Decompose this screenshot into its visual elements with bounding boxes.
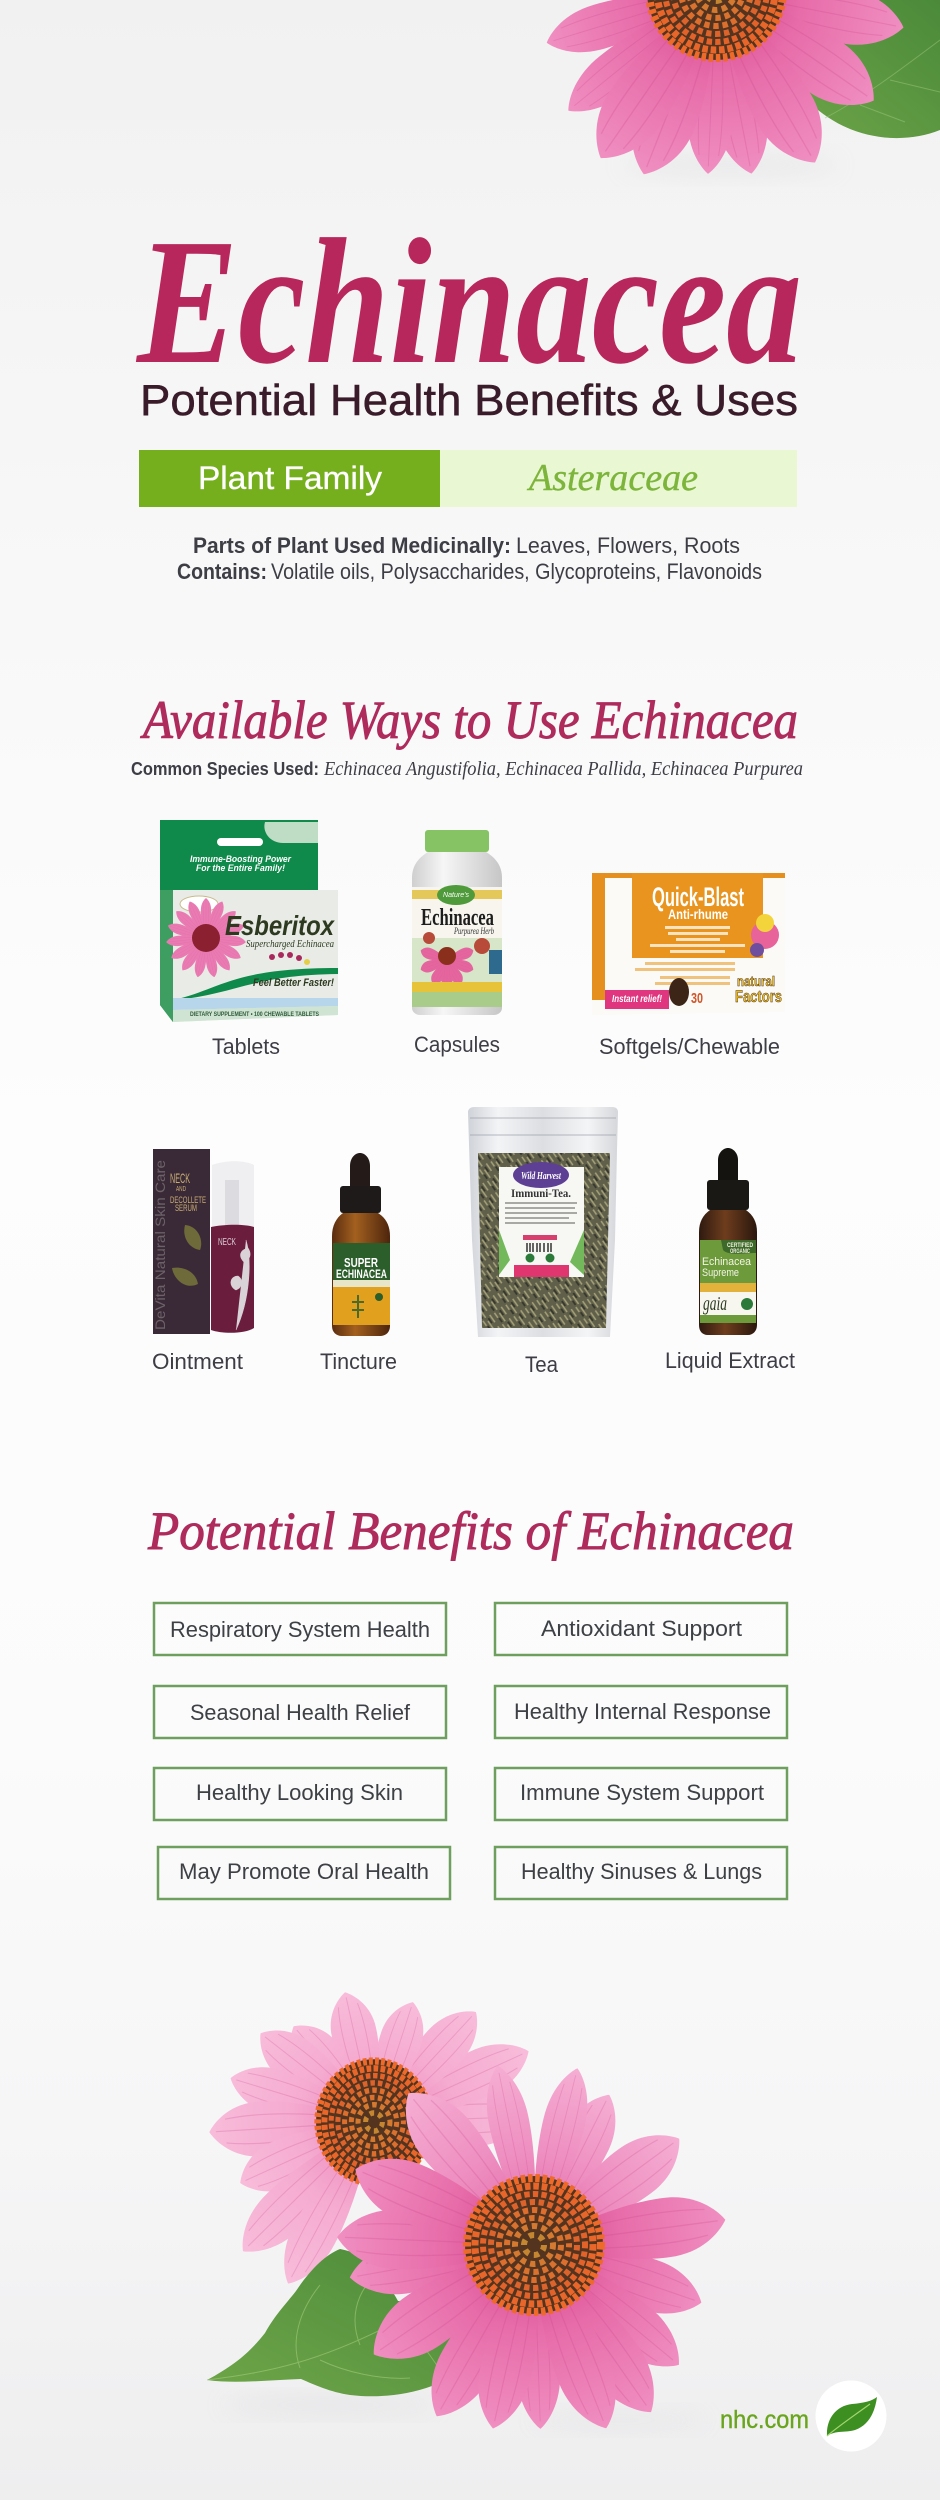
product: tablets: For the Entire Family! (196, 863, 285, 873)
product: tablets: Immune-Boosting Power (190, 854, 291, 864)
plant family bar: Asteraceae (526, 457, 698, 499)
product: ointment: SERUM (175, 1203, 197, 1213)
product: liquid extract (699, 1148, 757, 1335)
benefit: seasonal (154, 1686, 446, 1738)
common species line: Echinacea Angustifolia, Echinacea Pallida, Echinacea Purpurea (323, 758, 803, 780)
benefit: sinuses: Healthy Sinuses & Lungs (521, 1859, 762, 1884)
common species line: Common Species Used: (131, 759, 319, 779)
benefit: immune (495, 1768, 787, 1820)
heading: available ways: Available Ways to Use Echinacea (140, 690, 798, 750)
product: capsules: Nature's (443, 892, 469, 899)
title: Echinacea (135, 202, 802, 401)
product: tablets: Supercharged Echinacea (246, 938, 334, 950)
plant family bar (139, 450, 797, 507)
label: tea: Tea (525, 1352, 559, 1377)
product: tincture (332, 1153, 390, 1336)
product: softgels: natural (737, 973, 775, 989)
product: liquid extract: Echinacea (702, 1256, 752, 1268)
plant family bar: Plant Family (198, 460, 382, 496)
product: tablets: Esberitox (225, 910, 335, 941)
product: ointment: DeVita Natural Skin Care (152, 1160, 168, 1330)
product: ointment: DECOLLETE (170, 1195, 206, 1205)
plant parts and contents: Leaves, Flowers, Roots (516, 533, 740, 558)
benefit: immune: Immune System Support (520, 1780, 764, 1805)
plant parts and contents: Parts of Plant Used Medicinally: (193, 533, 511, 558)
benefit: skin (154, 1768, 446, 1820)
product: ointment: NECK (218, 1237, 236, 1248)
product: ointment: NECK (170, 1170, 190, 1186)
label: capsules: Capsules (414, 1032, 500, 1057)
product: capsules (412, 830, 502, 1015)
benefit: sinuses (495, 1847, 787, 1899)
plant parts and contents: Contains: (177, 559, 267, 584)
benefit: antioxidant (495, 1603, 787, 1655)
subtitle: Potential Health Benefits & Uses (140, 376, 798, 425)
product: softgels: Quick-Blast (652, 882, 744, 912)
product: capsules: Echinacea (421, 905, 494, 931)
product: softgels: Instant relief! (612, 994, 663, 1005)
benefits grid (154, 1603, 787, 1899)
product: tablets: Feel Better Faster! (253, 977, 334, 989)
logo: nhc.com (720, 2380, 886, 2452)
benefit: respiratory (154, 1603, 446, 1655)
benefit: internal response (495, 1686, 787, 1738)
benefit: skin: Healthy Looking Skin (196, 1780, 403, 1805)
benefit: respiratory: Respiratory System Health (170, 1617, 430, 1642)
top flower with leaf (540, 0, 940, 185)
common species line (131, 758, 803, 780)
label: tincture: Tincture (320, 1349, 397, 1374)
product: tincture: SUPER (344, 1255, 378, 1270)
label: softgels: Softgels/Chewable (599, 1034, 780, 1059)
product: capsules: Purpurea Herb (453, 926, 494, 936)
label: liquid extract: Liquid Extract (665, 1348, 795, 1373)
plant parts and contents: Volatile oils, Polysaccharides, Glycoproteins, Flavonoids (271, 559, 762, 584)
benefit: oral: May Promote Oral Health (179, 1859, 429, 1884)
product: tea: Immuni-Tea. (511, 1186, 571, 1200)
product: liquid extract: gaia (703, 1293, 727, 1315)
product: tea (468, 1107, 618, 1337)
product: softgels: Anti-rhume (668, 906, 728, 922)
product: tablets (160, 820, 338, 1022)
label: ointment: Ointment (152, 1349, 243, 1374)
product: tincture: ECHINACEA (336, 1267, 387, 1281)
product: liquid extract: Supreme (702, 1267, 739, 1279)
product: tea: Wild Harvest (521, 1171, 562, 1182)
heading: potential benefits: Potential Benefits of Echinacea (147, 1501, 794, 1561)
benefit: internal response: Healthy Internal Response (514, 1699, 771, 1724)
benefit: oral (158, 1847, 450, 1899)
product: softgels: 30 (691, 990, 703, 1007)
product: ointment: AND (176, 1186, 186, 1193)
plant parts and contents (177, 533, 762, 584)
benefit: antioxidant: Antioxidant Support (541, 1616, 742, 1641)
product: ointment (152, 1149, 254, 1334)
product: liquid extract: ORGANIC (730, 1249, 750, 1255)
logo: nhc.com: nhc.com (720, 2406, 809, 2434)
product: softgels (592, 873, 785, 1015)
icon: leaf badge (816, 2380, 886, 2452)
product: liquid extract: CERTIFIED (727, 1243, 754, 1249)
product: tablets: DIETARY SUPPLEMENT • 100 CHEWABLE TABLETS (190, 1012, 319, 1018)
product: softgels: Factors (735, 987, 782, 1006)
label: tablets: Tablets (212, 1034, 280, 1059)
benefit: seasonal: Seasonal Health Relief (190, 1700, 411, 1725)
bottom flowers with leaf (207, 1987, 729, 2438)
